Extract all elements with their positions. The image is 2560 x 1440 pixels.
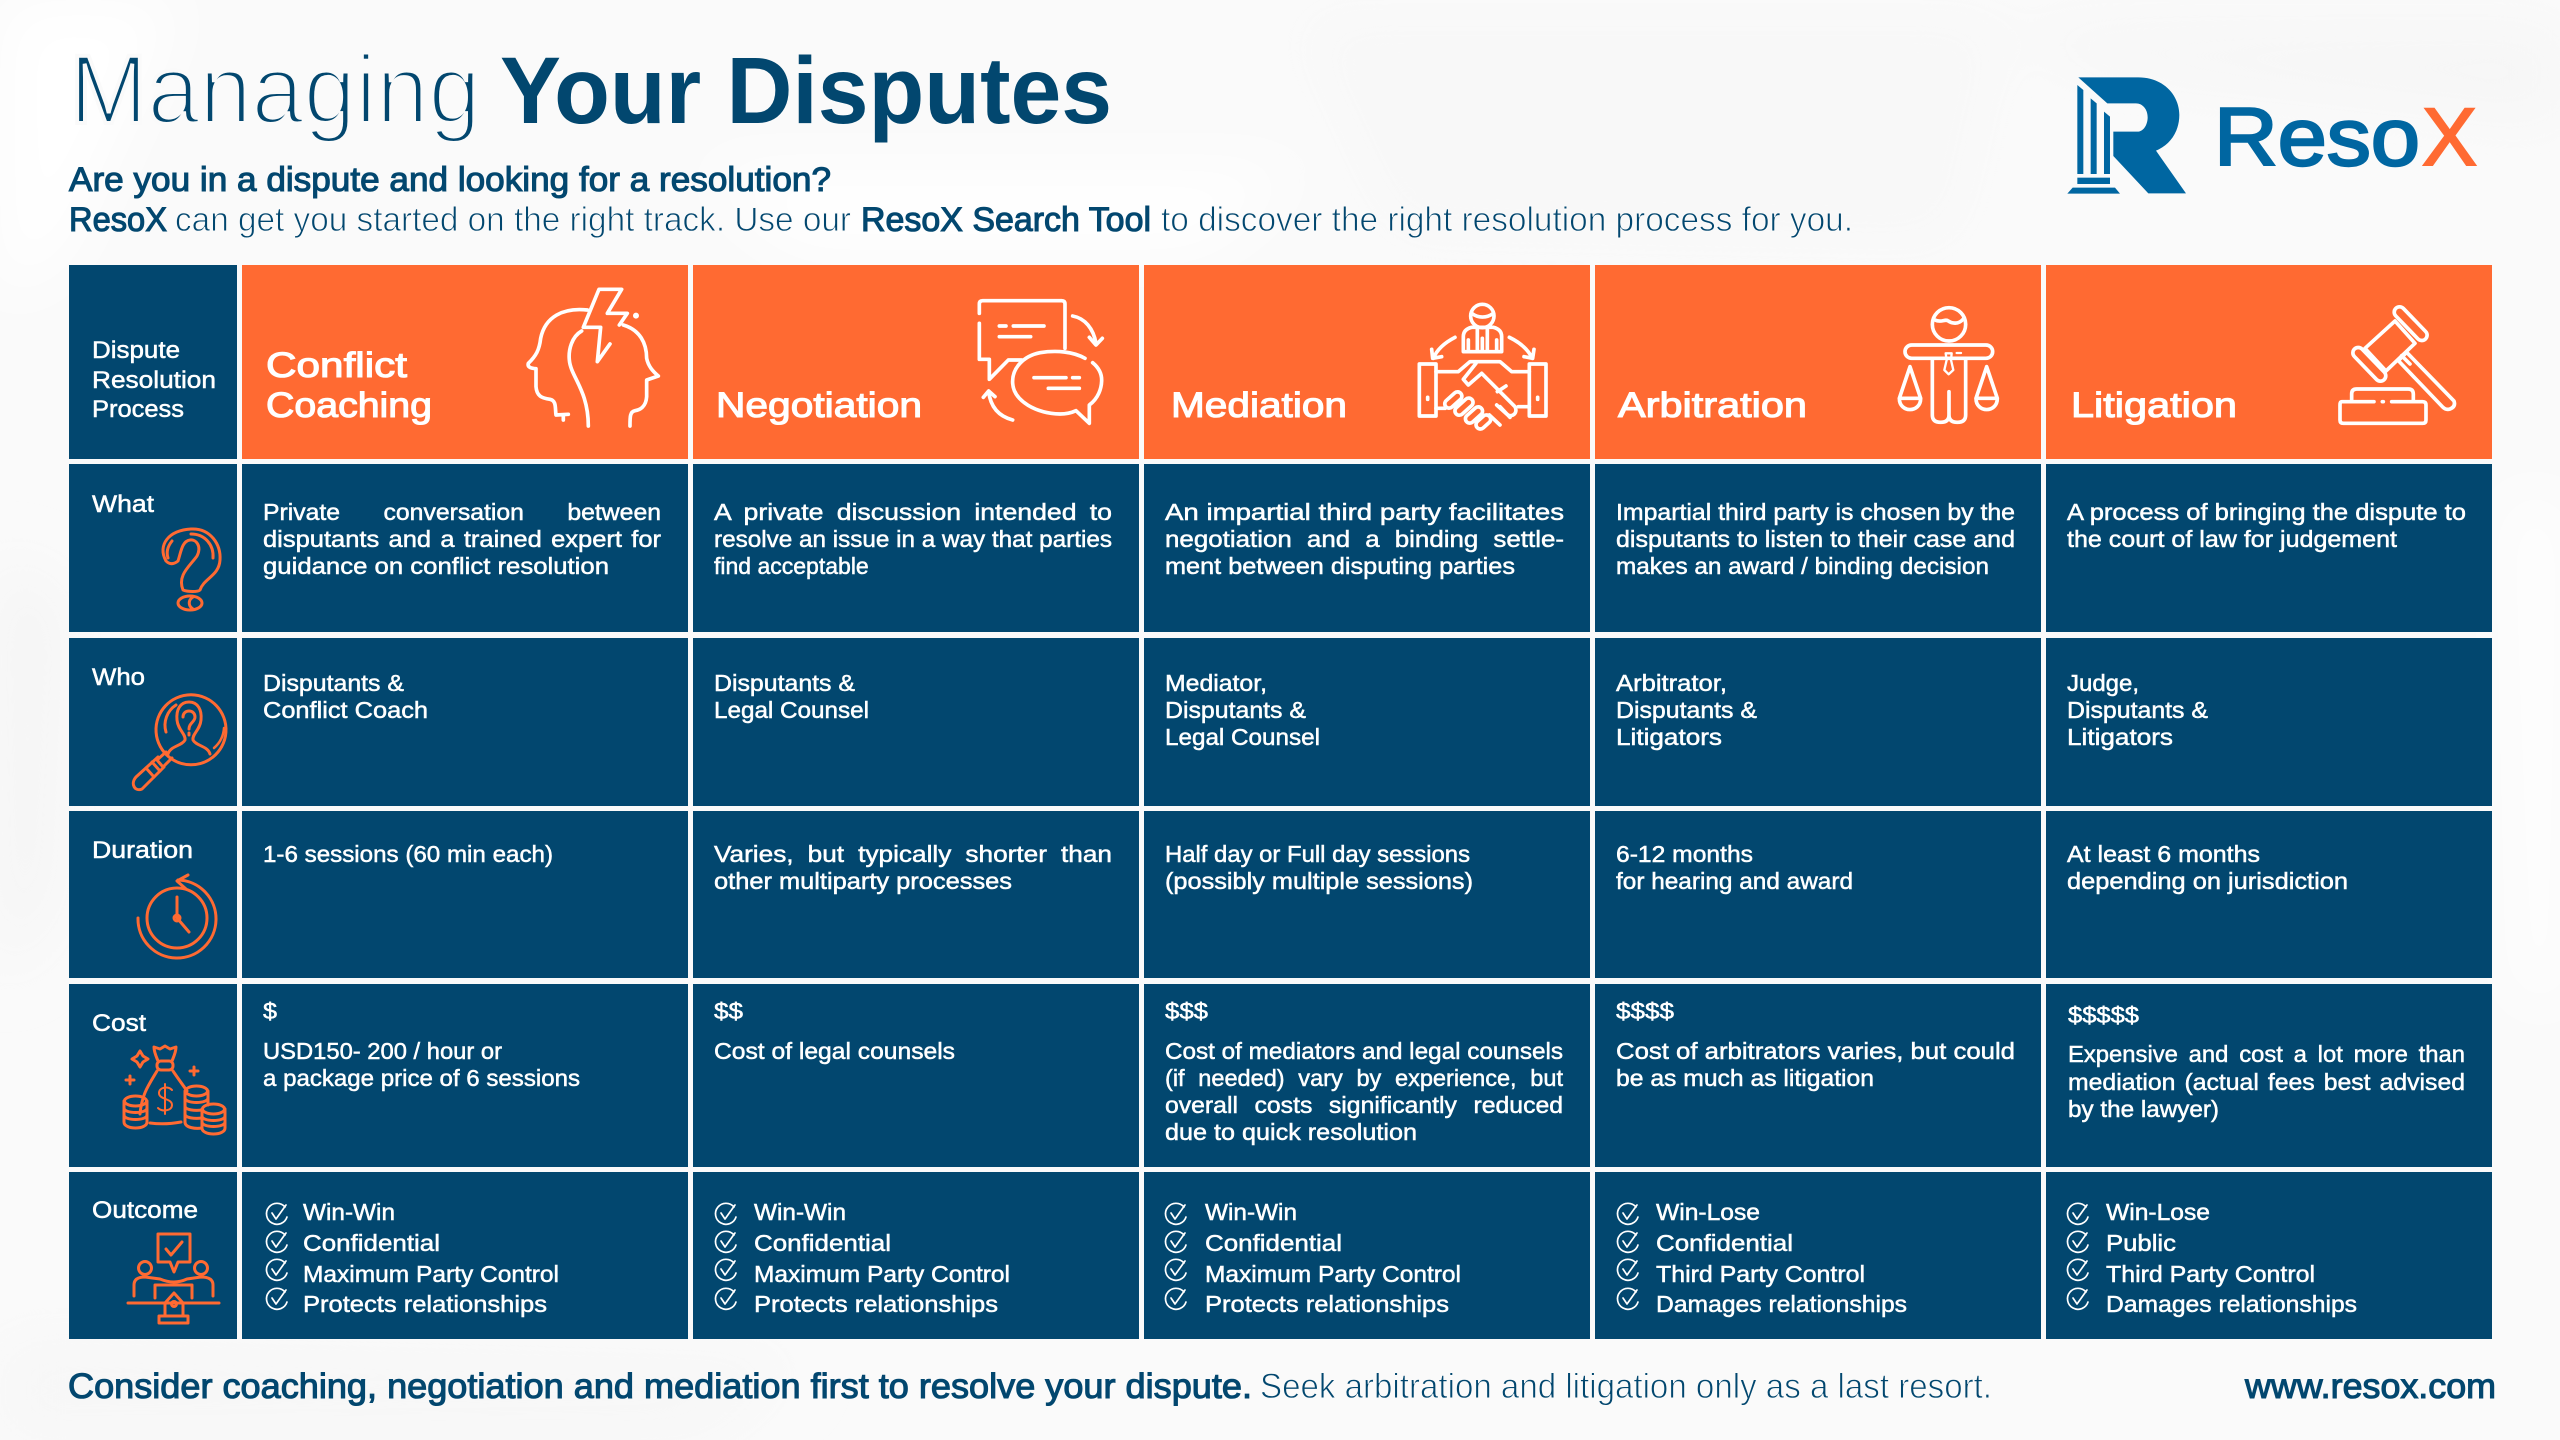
cell: Mediation outcome: Maximum Party Control <box>1205 1261 1461 1287</box>
cell: Conflict Coaching who: Disputants & <box>263 670 404 696</box>
row: Outcome <box>69 1172 2492 1339</box>
icon: checkmarks <box>266 1203 287 1309</box>
cell: Mediation who: Legal Counsel <box>1165 724 1320 750</box>
row label: What <box>69 464 237 632</box>
cell: Arbitration who: Disputants & <box>1616 697 1757 723</box>
cell: Arbitration who: Arbitrator, <box>1616 670 1727 696</box>
cell: Mediation what: ment between disputing parties <box>1165 553 1515 579</box>
row label: Outcome <box>69 1172 237 1339</box>
cell: Negotiation outcome: Win-Win <box>754 1199 846 1225</box>
subtitle description: ResoX <box>69 201 167 239</box>
header: Arbitration <box>1595 265 2041 459</box>
cell: Negotiation who: Legal Counsel <box>714 697 869 723</box>
footer note: Consider coaching, negotiation and mediation first to resolve your dispute. <box>68 1367 1252 1406</box>
footer note: Seek arbitration and litigation only as a last resort. <box>1260 1367 1992 1406</box>
cell: Conflict Coaching outcome <box>242 1172 688 1339</box>
cell: Mediation cost: $$$ <box>1165 998 1208 1024</box>
cell: Conflict Coaching outcome: Win-Win <box>303 1199 395 1225</box>
cell: Arbitration cost: Cost of arbitrators varies, but could <box>1616 1038 2015 1064</box>
title <box>70 35 1112 144</box>
header: Dispute Resolution Process: Resolution <box>92 367 216 394</box>
header: Litigation: Litigation <box>2071 386 2237 425</box>
icon: magnifier with person <box>133 695 226 790</box>
cell: Mediation what: An impartial third party facilitates <box>1165 499 1564 525</box>
cell: Negotiation who <box>693 638 1139 806</box>
header: Mediation: Mediation <box>1171 386 1347 425</box>
header: Arbitration: Arbitration <box>1618 386 1807 425</box>
cell: Mediation outcome: Protects relationships <box>1205 1291 1449 1317</box>
cell: Arbitration duration: for hearing and award <box>1616 868 1853 894</box>
cell: Conflict Coaching what <box>242 464 688 632</box>
cell: Litigation duration: depending on jurisdiction <box>2067 868 2348 894</box>
cell: Mediation cost: (if needed) vary by experience, but <box>1165 1065 1564 1091</box>
cell: Arbitration what: disputants to listen to their case and <box>1616 526 2015 552</box>
cell: Negotiation what: A private discussion intended to <box>714 499 1112 525</box>
cell: Arbitration outcome: Third Party Control <box>1656 1261 1865 1287</box>
cell: Litigation who <box>2046 638 2492 806</box>
cell: Negotiation cost: $$ <box>714 998 743 1024</box>
cell: Negotiation cost <box>693 984 1139 1167</box>
cell: Arbitration who: Litigators <box>1616 724 1722 750</box>
cell: Arbitration what: makes an award / binding decision <box>1616 553 1989 579</box>
cell: Negotiation duration <box>693 811 1139 978</box>
cell: Mediation duration: (possibly multiple sessions) <box>1165 868 1473 894</box>
cell: Conflict Coaching cost: a package price of 6 sessions <box>263 1065 580 1091</box>
cell: Mediation outcome: Win-Win <box>1205 1199 1297 1225</box>
subtitle description <box>69 201 1853 239</box>
cell: Mediation outcome: Confidential <box>1205 1230 1342 1256</box>
cell: Arbitration outcome: Win-Lose <box>1656 1199 1760 1225</box>
cell: Conflict Coaching who <box>242 638 688 806</box>
icon: checkmarks <box>715 1203 736 1309</box>
icon: speech bubbles <box>979 301 1102 423</box>
subtitle description: can get you started on the right track. Use our <box>175 201 851 239</box>
cell: Conflict Coaching duration: 1-6 sessions (60 min each) <box>263 841 553 867</box>
row label: Outcome: Outcome <box>92 1197 198 1224</box>
cell: Arbitration what <box>1595 464 2041 632</box>
cell: Litigation outcome: Win-Lose <box>2106 1199 2210 1225</box>
cell: Mediation who <box>1144 638 1590 806</box>
cell: Litigation what: A process of bringing the dispute to <box>2067 499 2466 525</box>
cell: Litigation cost <box>2046 984 2492 1167</box>
cell: Arbitration duration <box>1595 811 2041 978</box>
row label: Who: Who <box>92 664 145 691</box>
cell: Arbitration cost <box>1595 984 2041 1167</box>
icon: question mark <box>163 529 220 610</box>
header: Litigation <box>2046 265 2492 459</box>
row: Cost <box>69 984 2492 1167</box>
cell: Negotiation outcome <box>693 1172 1139 1339</box>
row label: Who <box>69 638 237 806</box>
cell: Negotiation duration: Varies, but typically shorter than <box>714 841 1112 867</box>
logo wordmark: X <box>2422 92 2477 183</box>
cell: Arbitration duration: 6-12 months <box>1616 841 1753 867</box>
icon: two people with decision <box>128 1234 219 1323</box>
cell: Litigation who: Disputants & <box>2067 697 2208 723</box>
row label: Duration <box>69 811 237 978</box>
logo wordmark: Reso <box>2214 92 2420 183</box>
icon: two heads with lightning <box>528 289 658 426</box>
row: Duration <box>69 811 2492 978</box>
cell: Mediation cost: overall costs significantly reduced <box>1165 1092 1563 1118</box>
cell: Negotiation who: Disputants & <box>714 670 855 696</box>
cell: Negotiation outcome: Confidential <box>754 1230 891 1256</box>
cell: Conflict Coaching what: disputants and a trained expert for <box>263 526 661 552</box>
title: Your Disputes <box>500 38 1112 144</box>
cell: Litigation outcome: Damages relationships <box>2106 1291 2357 1317</box>
icon: clock with arrow <box>138 875 216 958</box>
cell: Arbitration outcome <box>1595 1172 2041 1339</box>
icon: checkmarks <box>1165 1203 1186 1309</box>
header: Negotiation: Negotiation <box>716 386 922 425</box>
cell: Negotiation cost: Cost of legal counsels <box>714 1038 955 1064</box>
cell: Litigation duration <box>2046 811 2492 978</box>
cell: Negotiation what <box>693 464 1139 632</box>
cell: Mediation what: negotiation and a binding settle- <box>1165 526 1564 552</box>
icon: person as scales <box>1899 308 1997 422</box>
icon: mediator and handshake <box>1419 304 1546 431</box>
cell: Conflict Coaching what: Private conversation between <box>263 499 661 525</box>
row: Who <box>69 638 2492 806</box>
icon: checkmarks <box>2067 1203 2088 1309</box>
cell: Arbitration what: Impartial third party is chosen by the <box>1616 499 2015 525</box>
cell: Litigation outcome <box>2046 1172 2492 1339</box>
cell: Conflict Coaching outcome: Maximum Party Control <box>303 1261 559 1287</box>
cell: Negotiation outcome: Protects relationships <box>754 1291 998 1317</box>
cell: Negotiation what: find acceptable <box>714 553 869 579</box>
cell: Arbitration outcome: Damages relationships <box>1656 1291 1907 1317</box>
cell: Conflict Coaching cost: $ <box>263 998 277 1024</box>
cell: Conflict Coaching duration <box>242 811 688 978</box>
header: Conflict Coaching: Coaching <box>266 386 432 425</box>
cell: Litigation who: Litigators <box>2067 724 2173 750</box>
cell: Arbitration outcome: Confidential <box>1656 1230 1793 1256</box>
row label: Duration: Duration <box>92 837 193 864</box>
cell: Conflict Coaching what: guidance on conflict resolution <box>263 553 609 579</box>
cell: Negotiation duration: other multiparty processes <box>714 868 1012 894</box>
header: Dispute Resolution Process: Process <box>92 396 184 423</box>
cell: Mediation who: Disputants & <box>1165 697 1306 723</box>
cell: Litigation cost: mediation (actual fees best advised <box>2068 1069 2465 1095</box>
cell: Negotiation what: resolve an issue in a way that parties <box>714 526 1112 552</box>
subtitle question: Are you in a dispute and looking for a resolution? <box>69 161 831 199</box>
cell: Mediation cost <box>1144 984 1590 1167</box>
header: Dispute Resolution Process <box>69 265 237 459</box>
footer note <box>68 1367 1992 1406</box>
cell: Mediation cost: Cost of mediators and legal counsels <box>1165 1038 1563 1064</box>
cell: Litigation what <box>2046 464 2492 632</box>
cell: Arbitration cost: be as much as litigation <box>1616 1065 1874 1091</box>
row label: Cost <box>69 984 237 1167</box>
header: Conflict Coaching <box>242 265 688 459</box>
row label: What: What <box>92 491 154 518</box>
row label: Cost: Cost <box>92 1010 146 1037</box>
cell: Conflict Coaching cost <box>242 984 688 1167</box>
cell: Litigation cost: $$$$$ <box>2068 1002 2139 1028</box>
subtitle description: ResoX Search Tool <box>861 201 1151 239</box>
cell: Mediation outcome <box>1144 1172 1590 1339</box>
icon: R with pillar <box>2067 77 2186 194</box>
cell: Mediation who: Mediator, <box>1165 670 1267 696</box>
icon: gavel <box>2340 305 2454 423</box>
icon: money bag and coins <box>124 1046 225 1134</box>
logo: ResoX <box>2067 77 2477 194</box>
cell: Mediation what <box>1144 464 1590 632</box>
cell: Litigation outcome: Third Party Control <box>2106 1261 2315 1287</box>
cell: Mediation duration <box>1144 811 1590 978</box>
icon: checkmarks <box>1617 1203 1638 1309</box>
cell: Conflict Coaching cost: USD150- 200 / hour or <box>263 1038 502 1064</box>
cell: Arbitration who <box>1595 638 2041 806</box>
subtitle description: to discover the right resolution process for you. <box>1161 201 1853 239</box>
cell: Arbitration cost: $$$$ <box>1616 998 1674 1024</box>
cell: Litigation cost: Expensive and cost a lot more than <box>2068 1041 2465 1067</box>
cell: Conflict Coaching outcome: Protects relationships <box>303 1291 547 1317</box>
cell: Litigation outcome: Public <box>2106 1230 2176 1256</box>
header: Dispute Resolution Process: Dispute <box>92 337 180 364</box>
footer website: www.resox.com <box>2244 1367 2496 1406</box>
row: What <box>69 464 2492 632</box>
cell: Litigation what: the court of law for judgement <box>2067 526 2398 552</box>
cell: Mediation cost: due to quick resolution <box>1165 1119 1417 1145</box>
header row <box>69 265 2492 459</box>
cell: Conflict Coaching who: Conflict Coach <box>263 697 428 723</box>
header: Mediation <box>1144 265 1590 459</box>
header: Conflict Coaching: Conflict <box>266 346 407 385</box>
cell: Negotiation outcome: Maximum Party Control <box>754 1261 1010 1287</box>
header: Negotiation <box>693 265 1139 459</box>
cell: Conflict Coaching outcome: Confidential <box>303 1230 440 1256</box>
cell: Mediation duration: Half day or Full day sessions <box>1165 841 1470 867</box>
cell: Litigation cost: by the lawyer) <box>2068 1096 2219 1122</box>
cell: Litigation who: Judge, <box>2067 670 2139 696</box>
cell: Litigation duration: At least 6 months <box>2067 841 2260 867</box>
title: Managing <box>70 35 480 144</box>
